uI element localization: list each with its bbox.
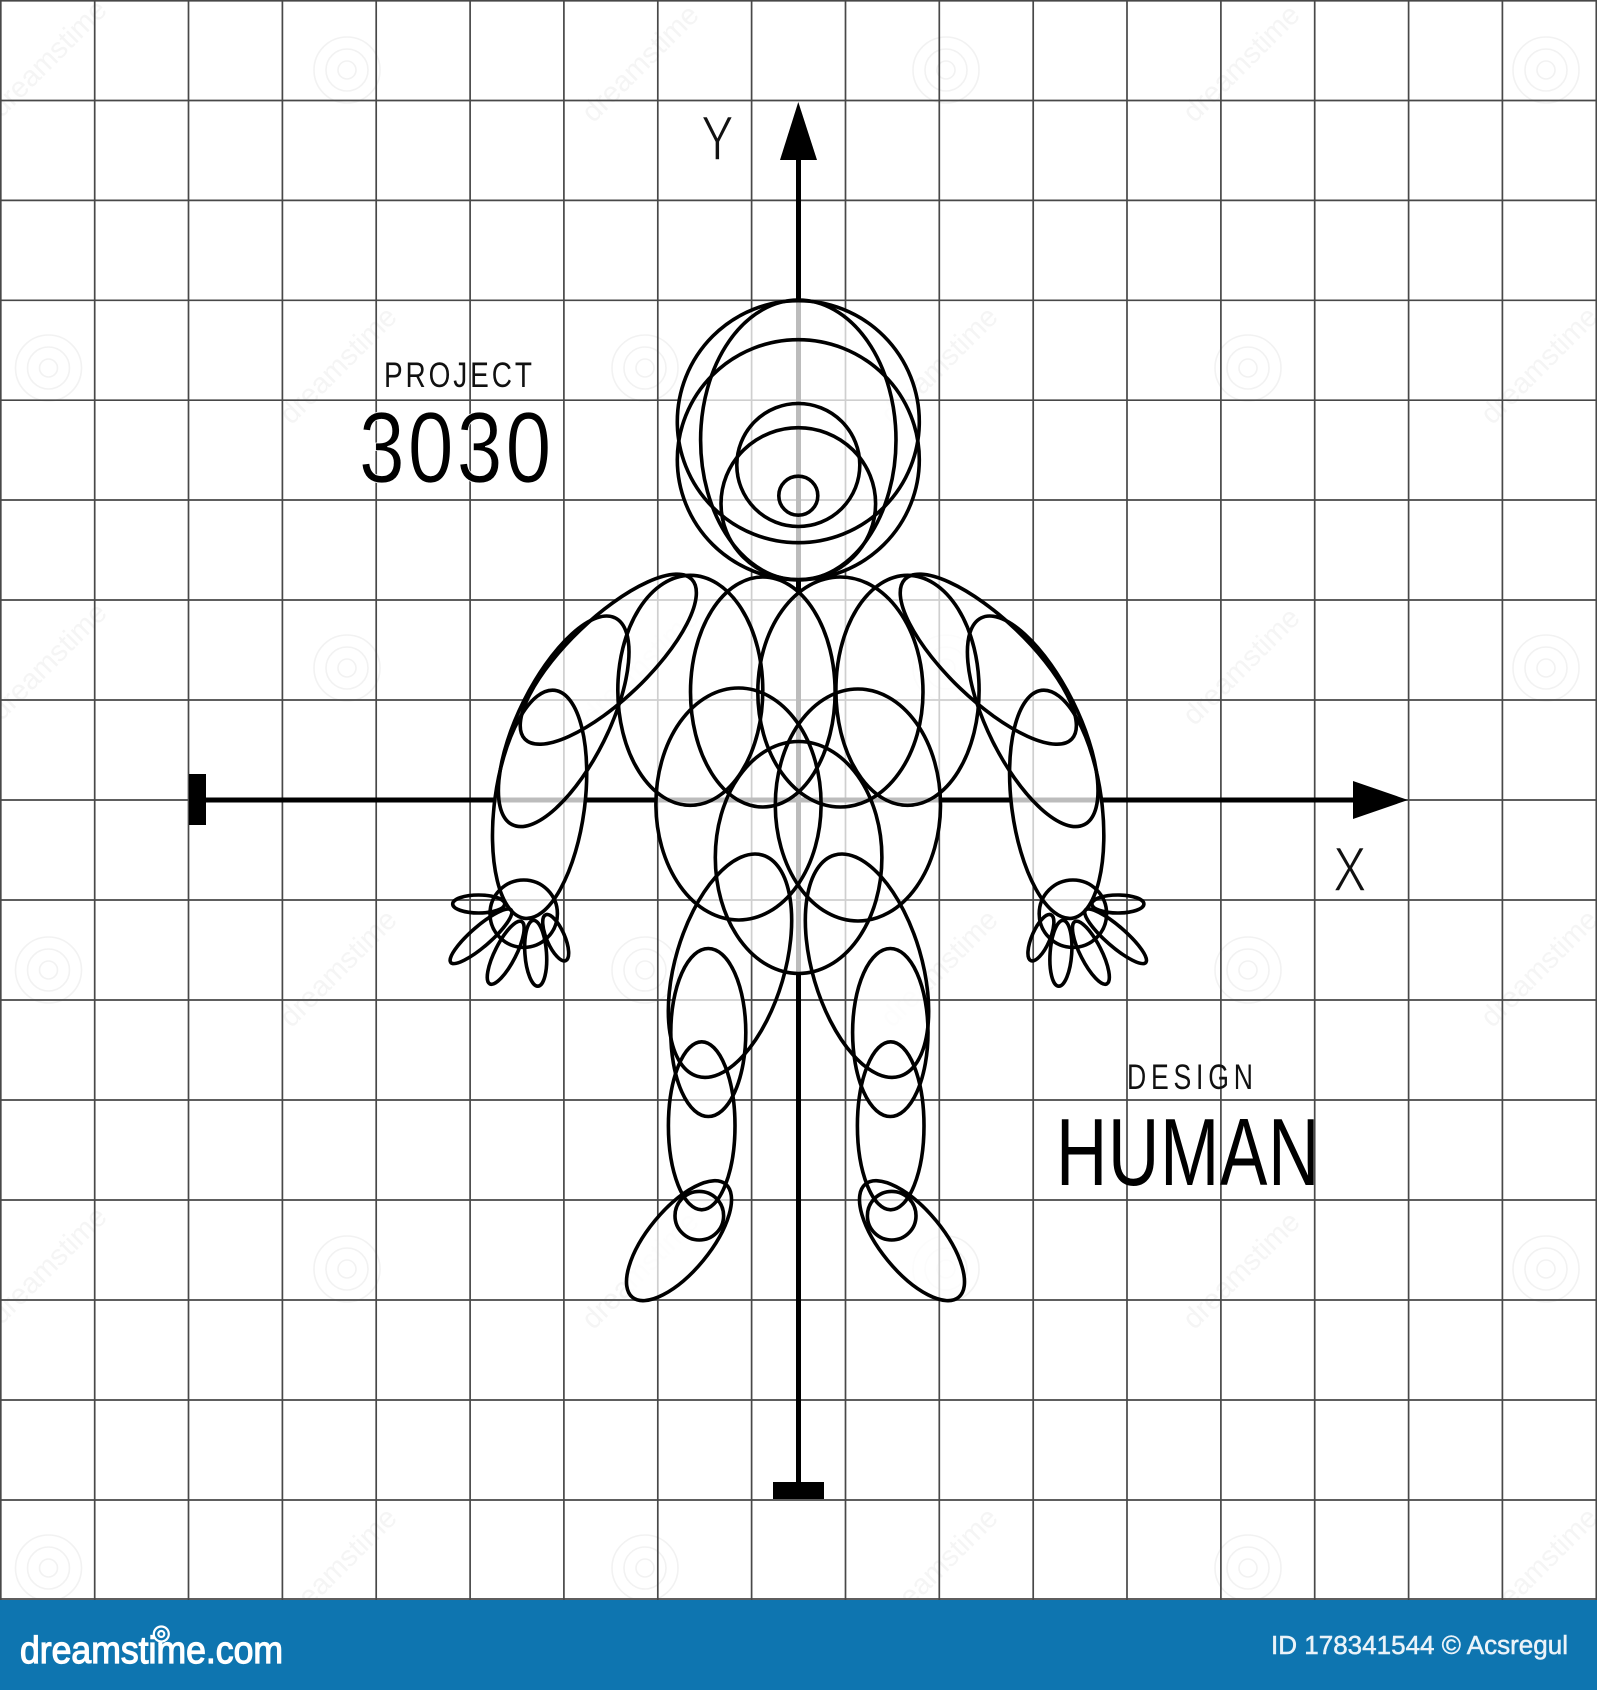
watermark diagonal text: dreamstime [1177,1206,1307,1336]
watermark diagonal text: dreamstime [576,0,706,129]
watermark diagonal text: dreamstime [875,301,1005,431]
right arm [877,550,1124,924]
x axis with arrow [189,774,1408,825]
watermark diagonal text: dreamstime [274,904,404,1034]
project number 3030: 3030 [359,392,555,504]
footer brand name: dreamstime.com [20,1630,283,1672]
watermark diagonal text: dreamstime [875,1502,1005,1632]
head [677,300,919,580]
project label: PROJECT [384,355,535,395]
watermark diagonal text: dreamstime [576,1206,706,1336]
icon: brand spiral [154,1626,169,1642]
human figure built from ellipses [444,300,1152,1317]
watermark diagonal text: dreamstime [1177,602,1307,732]
left hand [444,880,574,989]
right hand [1023,880,1152,989]
torso [618,575,979,974]
y axis label: Y [701,103,734,173]
body veil lightening grid and axes behind the figure [472,301,1124,1317]
watermark diagonal text: dreamstime [1177,0,1307,129]
watermark diagonal text: dreamstime [274,301,404,431]
right leg [782,840,983,1317]
y axis with arrow [773,102,824,1499]
x axis label: X [1333,835,1367,905]
footer image id and credit: ID 178341544 © Acsregul [1271,1632,1568,1660]
watermark diagonal text: dreamstime [274,1502,404,1632]
human heading: HUMAN [1056,1099,1320,1205]
watermark diagonal text: dreamstime [875,904,1005,1034]
watermark diagonal text: dreamstime [576,602,706,732]
design label: DESIGN [1127,1057,1258,1097]
footer bar [0,1600,1597,1690]
left leg [608,840,815,1317]
left arm [472,550,720,924]
